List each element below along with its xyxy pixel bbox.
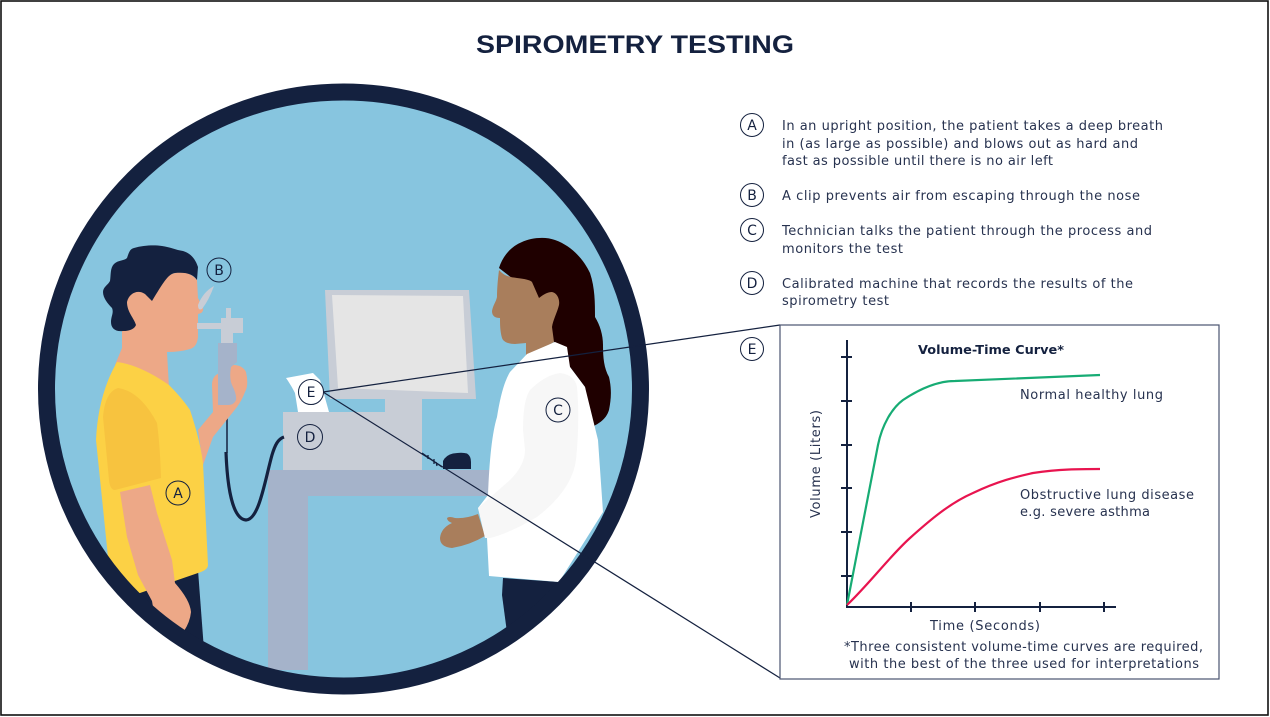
illustration label A (166, 481, 190, 505)
technician hand (440, 514, 485, 548)
patient pants (140, 572, 204, 642)
illustration label E: E (307, 385, 315, 401)
title: SPIROMETRY TESTING (476, 31, 794, 59)
legend item A: In an upright position, the patient takes a deep breath (782, 119, 1163, 134)
chart axes (841, 340, 1116, 612)
illustration label A: A (173, 486, 183, 502)
inhaler mouthpiece (197, 308, 243, 343)
patient hair (103, 245, 198, 331)
label: obstructive lung disease: Obstructive lung disease (1020, 488, 1194, 503)
label: obstructive lung disease: e.g. severe asthma (1020, 505, 1150, 520)
label: normal lung: Normal healthy lung (1020, 388, 1163, 403)
patient far arm (198, 365, 247, 465)
normal lung curve (847, 375, 1100, 605)
technician (440, 238, 611, 660)
illustration label B: B (214, 263, 224, 279)
legend item D (740, 272, 1133, 309)
patient shirt (96, 362, 208, 593)
illustration label C (546, 398, 570, 422)
illustration label D: D (305, 430, 315, 446)
patient head and neck (115, 272, 203, 388)
chart footnote: with the best of the three used for interpretations (849, 657, 1199, 672)
technician pants (502, 578, 558, 628)
legend item D: Calibrated machine that records the results of the (782, 277, 1133, 292)
legend item A: in (as large as possible) and blows out as hard and (782, 137, 1138, 152)
technician hair (499, 238, 611, 428)
legend item D: D (747, 276, 757, 292)
illustration label D (298, 424, 322, 450)
monitor (325, 290, 476, 412)
illustration label B (207, 258, 231, 282)
legend item A: fast as possible until there is no air left (782, 154, 1053, 169)
technician sleeve (478, 508, 487, 538)
panel: volume-time chart (780, 325, 1219, 679)
spirometer machine (283, 412, 422, 470)
paper printout (286, 373, 329, 412)
illustration label C: C (553, 403, 563, 419)
zoom lines (323, 325, 780, 678)
chart heading: Volume-Time Curve* (918, 342, 1064, 357)
patient sleeve (103, 388, 161, 490)
legend item C: Technician talks the patient through the process and (781, 224, 1152, 239)
legend item E: E (748, 342, 756, 358)
legend item B: A clip prevents air from escaping through the nose (782, 189, 1140, 204)
inhaler body (218, 343, 237, 405)
mouse (422, 453, 471, 469)
legend item A: A (747, 118, 757, 134)
spirometer cord (226, 405, 284, 520)
y-axis label: Volume (Liters) (809, 410, 824, 518)
x-axis label: Time (Seconds) (929, 619, 1040, 634)
legend item B: B (747, 188, 757, 204)
technician face (492, 270, 559, 358)
label: obstructive lung disease (1020, 488, 1194, 520)
legend item D: spirometry test (782, 294, 889, 309)
technician coat (478, 342, 603, 582)
circle ring (46, 92, 640, 686)
legend item C: monitors the test (782, 242, 903, 257)
illustration circle (46, 91, 642, 687)
table (268, 470, 492, 670)
chart footnote: *Three consistent volume-time curves are required, (844, 640, 1203, 655)
legend item E (740, 338, 764, 360)
legend item A (740, 114, 1163, 169)
chart footnote (844, 640, 1203, 672)
nose clip (198, 286, 214, 310)
legend item C (740, 218, 1152, 257)
illustration label E (298, 380, 324, 404)
legend item C: C (747, 223, 757, 239)
obstructive lung curve (847, 469, 1100, 605)
legend item B (740, 184, 1140, 206)
patient arm (120, 485, 191, 631)
patient (96, 245, 247, 650)
